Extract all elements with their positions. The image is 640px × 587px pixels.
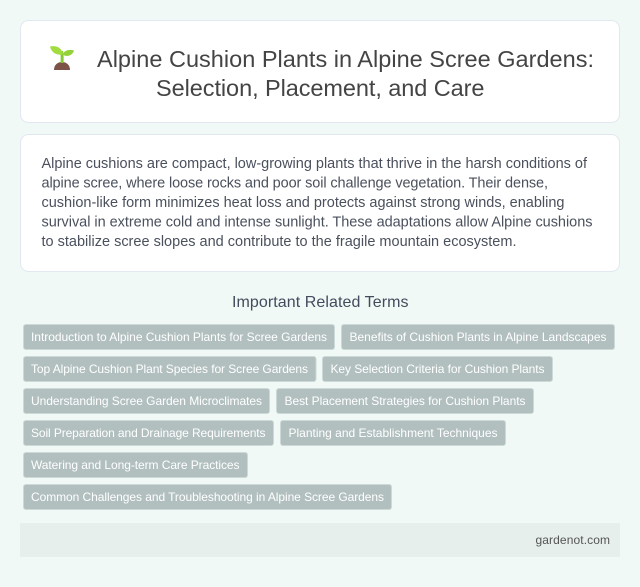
icon: seedling	[50, 46, 74, 70]
title: Selection, Placement, and Care	[156, 75, 484, 101]
tag: top species: Top Alpine Cushion Plant Species for Scree Gardens	[31, 362, 308, 376]
tag: watering and care	[24, 452, 248, 478]
tag group: related terms	[24, 324, 614, 510]
tag: selection criteria	[322, 356, 552, 382]
tag: top species	[24, 356, 316, 382]
description text: survival in extreme cold and intense sunlight. These adaptations allow Alpine cushions	[42, 214, 592, 230]
tag: benefits: Benefits of Cushion Plants in Alpine Landscapes	[350, 330, 606, 344]
description text: Alpine cushions are compact, low-growing plants that thrive in the harsh conditions of	[42, 156, 588, 172]
description text: to stabilize scree slopes and contribute to the fragile mountain ecosystem.	[42, 234, 516, 250]
tag: introduction: Introduction to Alpine Cushion Plants for Scree Gardens	[31, 330, 327, 344]
description text	[42, 156, 592, 250]
tag: placement strategies	[276, 388, 534, 414]
tag: planting techniques	[280, 420, 506, 446]
panel: title card	[20, 20, 620, 122]
footer source: gardenot.com	[536, 533, 610, 547]
tag: introduction	[24, 324, 334, 350]
description text: cushion-like form minimizes heat loss and protects against strong winds, enabling	[42, 195, 564, 211]
title: Alpine Cushion Plants in Alpine Scree Gardens:	[97, 46, 594, 72]
tag: planting techniques: Planting and Establishment Techniques	[288, 426, 498, 440]
footer	[20, 523, 620, 557]
tag: soil preparation	[24, 420, 274, 446]
tag: benefits	[342, 324, 614, 350]
description text: alpine scree, where loose rocks and poor soil challenge vegetation. Their dense,	[42, 176, 548, 192]
tag: common challenges: Common Challenges and Troubleshooting in Alpine Scree Gardens	[31, 490, 384, 504]
heading: important related terms: Important Related Terms	[232, 294, 408, 311]
tag: placement strategies: Best Placement Strategies for Cushion Plants	[284, 394, 526, 408]
tag: watering and care: Watering and Long-term Care Practices	[31, 458, 240, 472]
tag: microclimates	[24, 388, 270, 414]
tag: soil preparation: Soil Preparation and Drainage Requirements	[31, 426, 266, 440]
tag: microclimates: Understanding Scree Garden Microclimates	[31, 394, 262, 408]
tag: common challenges	[24, 484, 392, 510]
panel: description	[20, 134, 620, 272]
title	[97, 46, 594, 101]
tag: selection criteria: Key Selection Criteria for Cushion Plants	[330, 362, 544, 376]
